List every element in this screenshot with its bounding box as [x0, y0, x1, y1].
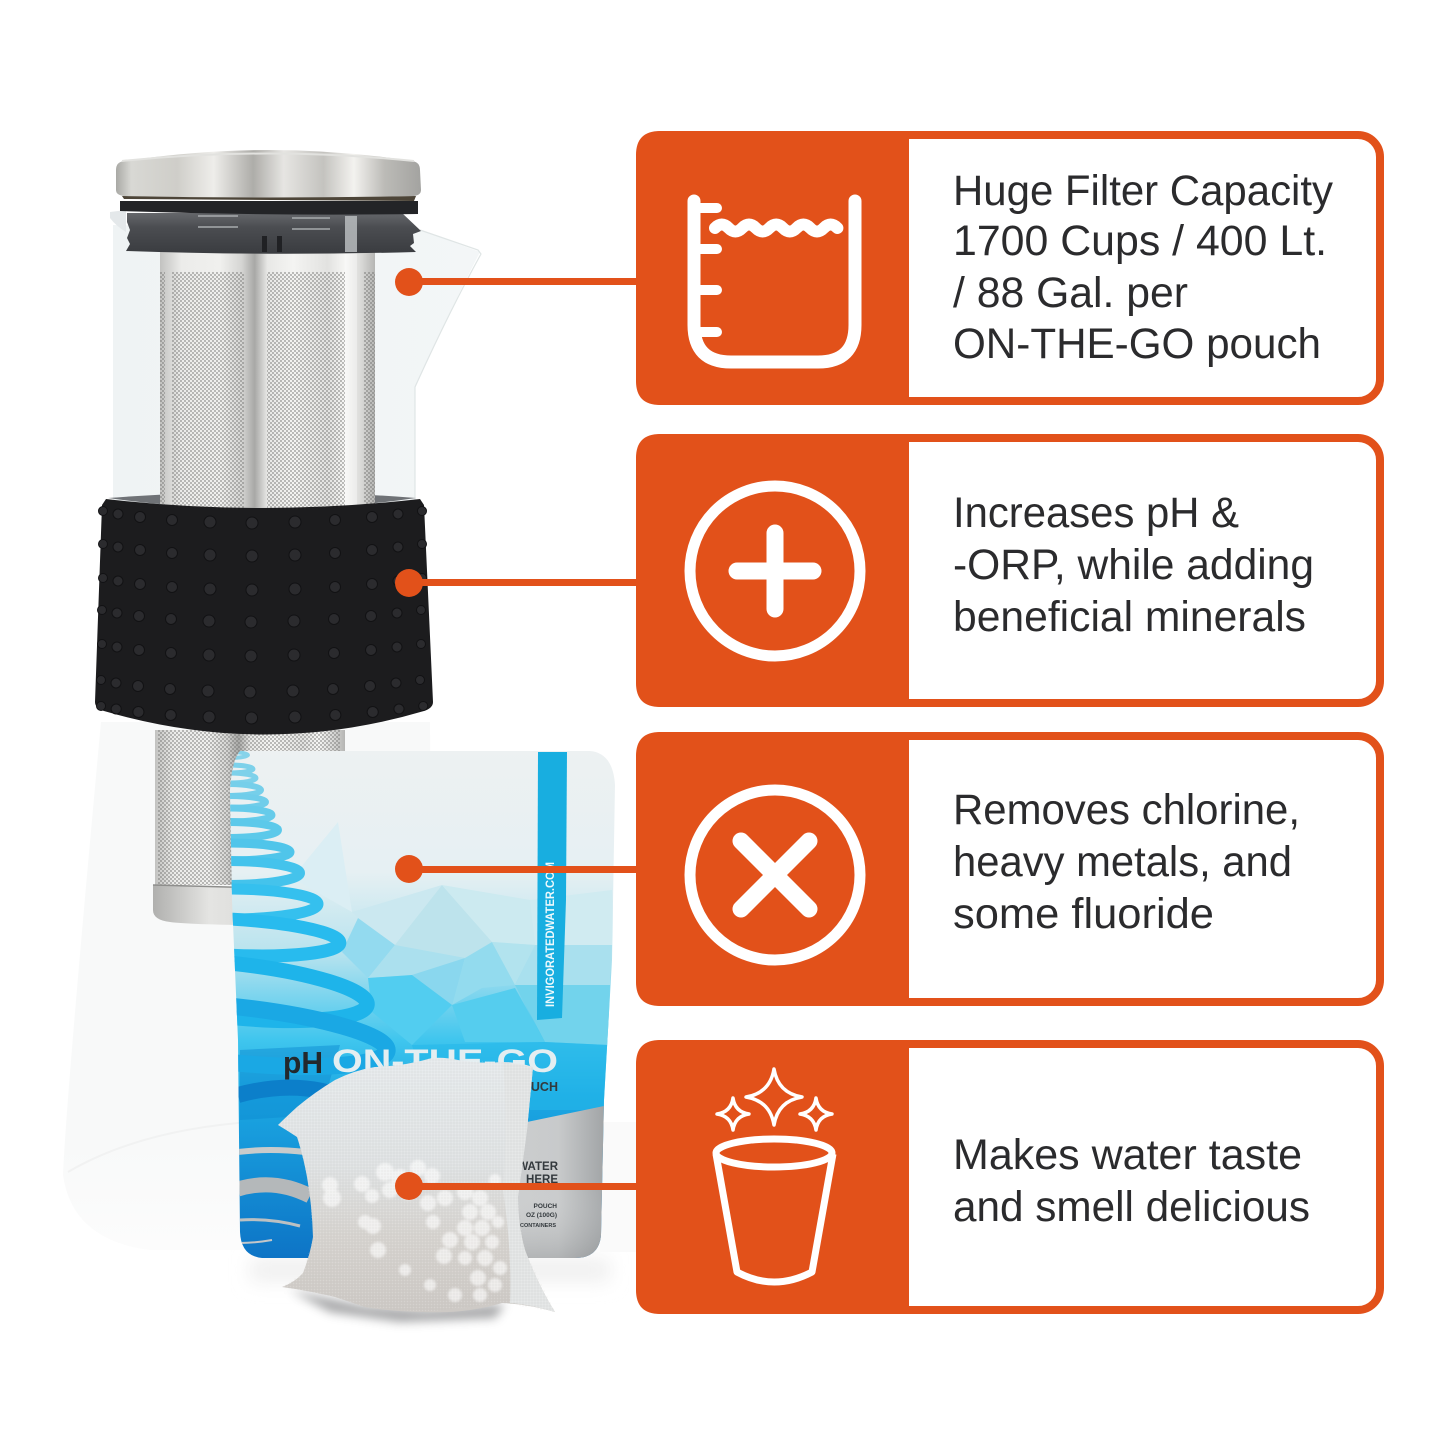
text: capacity: Huge Filter Capacity	[953, 167, 1333, 215]
silicone sleeve	[95, 499, 433, 734]
text: capacity: 1700 Cups / 400 Lt.	[953, 217, 1327, 265]
filter upper	[160, 215, 375, 512]
pouch	[230, 751, 615, 1258]
pouch product name: pH	[283, 1045, 323, 1080]
pouch small print: HERE	[526, 1174, 558, 1186]
pouch spiral coil	[230, 751, 396, 1075]
text: removes: some fluoride	[953, 890, 1214, 938]
connector 1	[395, 268, 639, 296]
icon: measuring beaker	[694, 201, 855, 362]
text: taste	[953, 1131, 1310, 1231]
mineral beads	[322, 1160, 507, 1302]
filter lower	[153, 730, 345, 925]
pouch small print: POUCH	[513, 1080, 558, 1094]
text: taste: Makes water taste	[953, 1131, 1302, 1179]
floor shadow	[250, 1122, 636, 1282]
pouch product name: ON-THE-GO	[332, 1043, 558, 1079]
connector lines and dots	[395, 268, 639, 1200]
text: capacity: ON-THE-GO pouch	[953, 320, 1321, 368]
text: pH: Increases pH &	[953, 489, 1239, 537]
neck threads	[110, 210, 421, 254]
text: taste: and smell delicious	[953, 1183, 1310, 1231]
text: removes	[953, 786, 1300, 938]
connector 4	[395, 1172, 639, 1200]
sleeve back rim	[108, 492, 416, 509]
panel: increases pH	[636, 434, 1380, 707]
panel: huge filter capacity	[636, 131, 1380, 405]
icon: cross in circle	[690, 790, 860, 960]
pouch small print: OZ (100G)	[526, 1212, 557, 1219]
panel: taste and smell	[636, 1040, 1380, 1314]
panel: removes contaminants	[636, 732, 1380, 1006]
pouch small print: WATER	[517, 1161, 559, 1173]
pouch low-poly facets	[240, 822, 612, 1120]
lid	[116, 150, 421, 215]
glass upper body and spout	[113, 225, 480, 505]
glass lower body	[63, 722, 432, 1250]
icon: sparkling cup	[716, 1069, 833, 1282]
icon: plus in circle	[690, 486, 860, 656]
glass base line	[68, 1120, 320, 1172]
text: removes: Removes chlorine,	[953, 786, 1300, 834]
text: pH: beneficial minerals	[953, 593, 1306, 641]
spout edge	[415, 230, 481, 500]
text: capacity	[953, 167, 1333, 368]
pouch grey panel	[518, 1106, 604, 1258]
text: pH: -ORP, while adding	[953, 541, 1314, 589]
text: pH	[953, 489, 1314, 641]
carafe	[63, 150, 481, 1250]
pouch product name	[283, 1043, 558, 1080]
pouch blue strip	[537, 752, 567, 1020]
pouch small print	[513, 1080, 559, 1229]
tea bag shadow	[290, 1290, 505, 1322]
sleeve bumps	[96, 506, 428, 724]
strip label: INVIGORATEDWATER.COM	[543, 862, 557, 1007]
pouch small print: CONTAINERS	[520, 1223, 556, 1229]
connector 3	[395, 855, 639, 883]
pouch small print: POUCH	[534, 1203, 557, 1210]
pouch lower waves	[238, 1080, 328, 1244]
text: capacity: / 88 Gal. per	[953, 269, 1188, 317]
mineral filter bag	[278, 1058, 555, 1312]
connector 2	[395, 569, 639, 597]
text: removes: heavy metals, and	[953, 838, 1292, 886]
